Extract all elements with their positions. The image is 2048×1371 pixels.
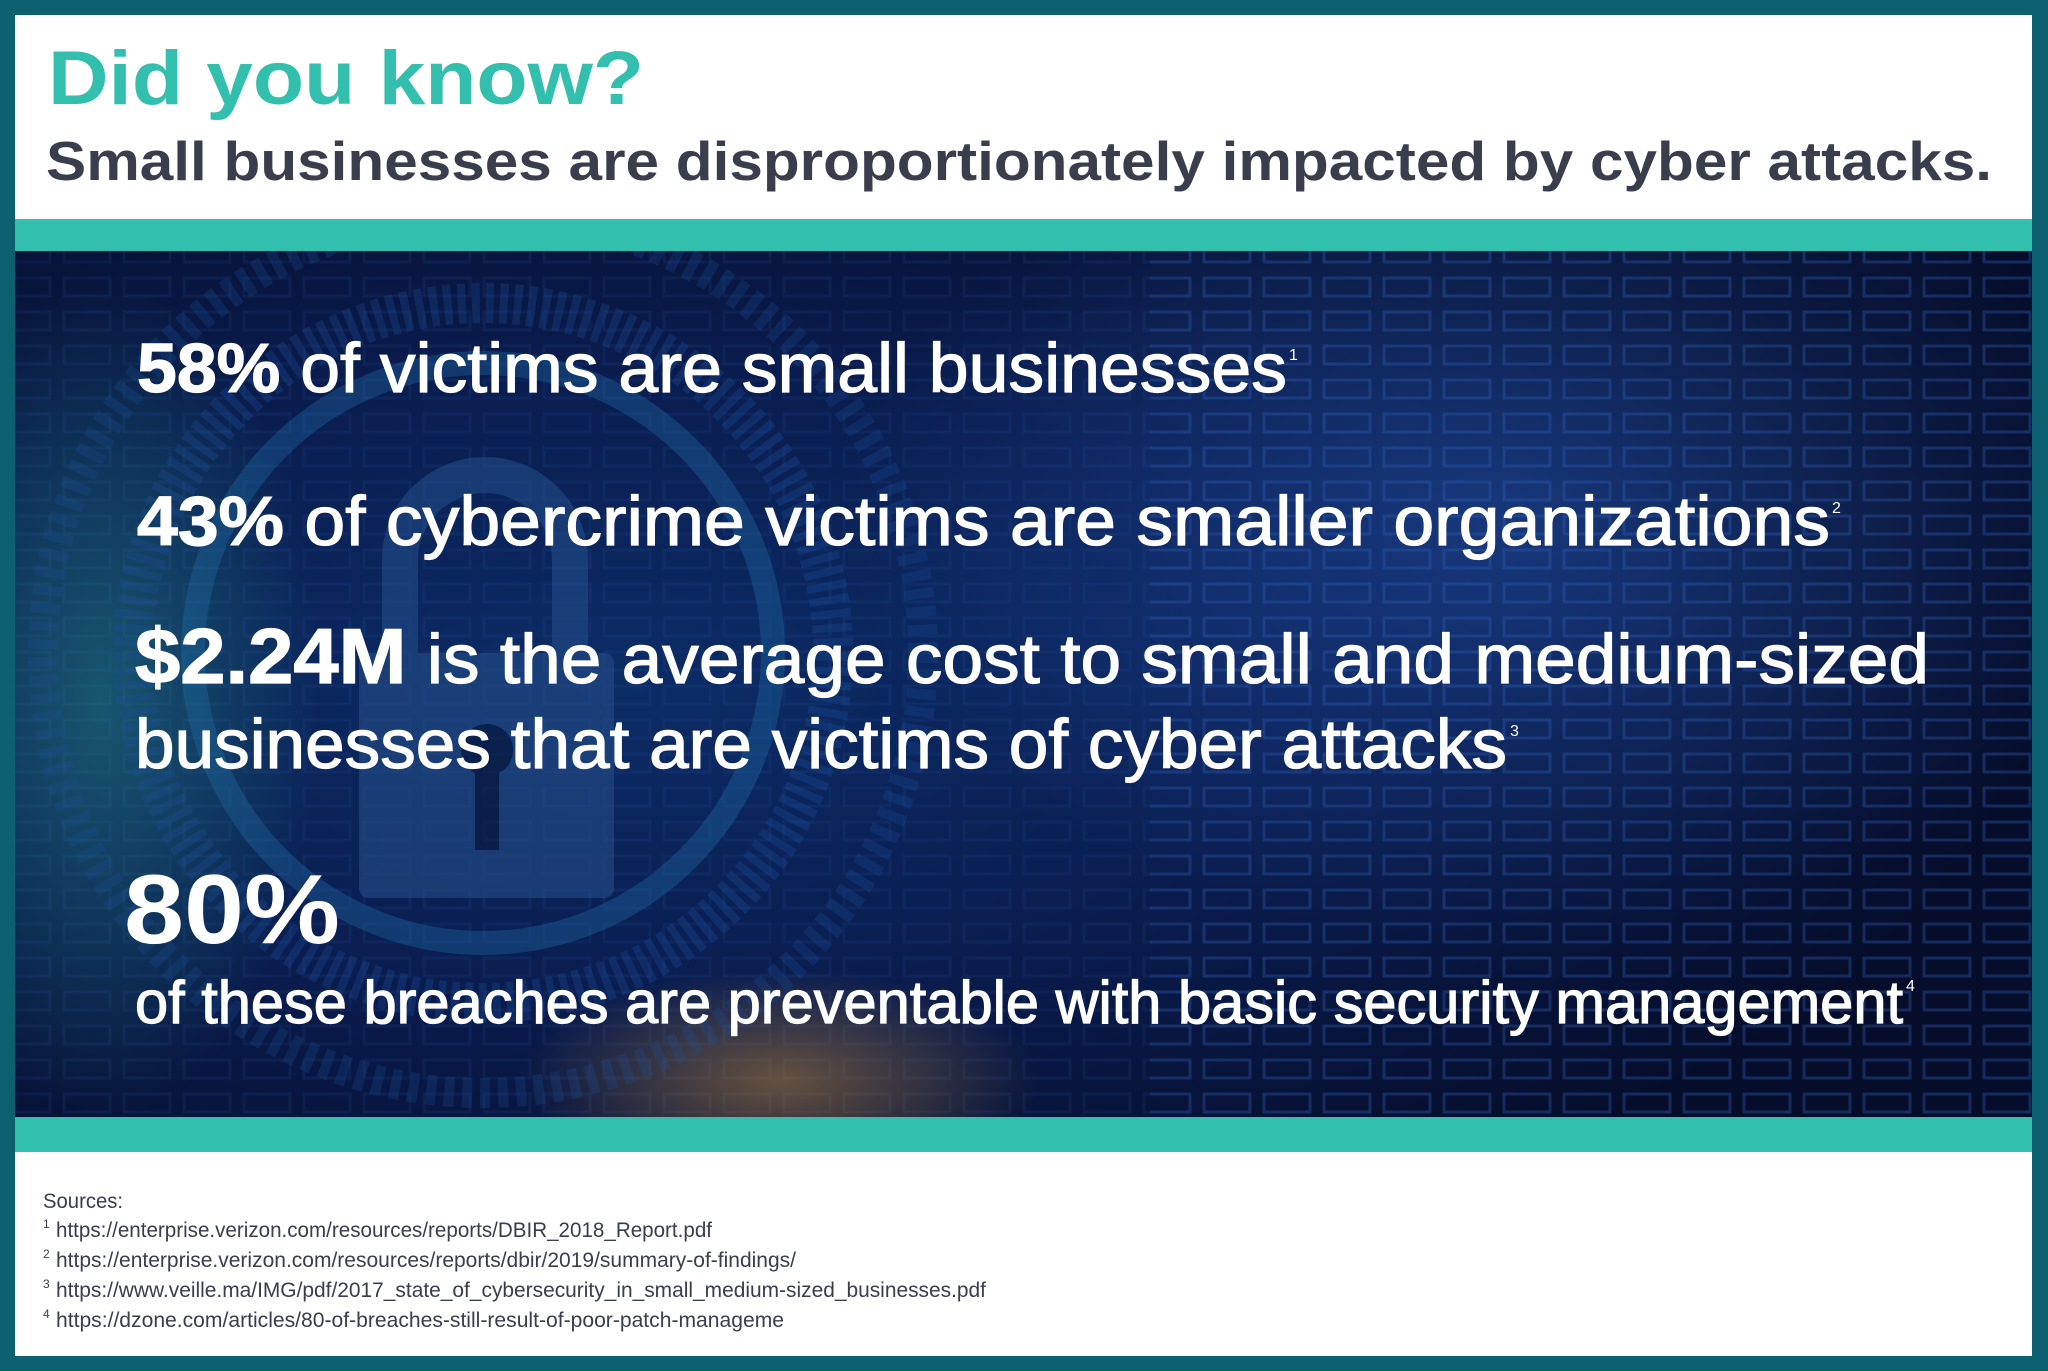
stat: 43%: 43% of cybercrime victims are smaller organizations [137, 482, 1830, 560]
title: Did you know? [48, 36, 644, 121]
teal bar top [15, 219, 2032, 251]
panel: dark cyber background with stats [15, 251, 2032, 1117]
sources panel: https://enterprise.verizon.com/resources/reports/dbir/2019/summary-of-findings/ [56, 1249, 796, 1272]
sources panel: 4 [43, 1307, 50, 1321]
icon: padlock background [359, 475, 614, 898]
sources panel: https://www.veille.ma/IMG/pdf/2017_state_of_cybersecurity_in_small_medium-sized_businesses.pdf [56, 1279, 986, 1302]
panel: dark cyber background with stats: of these breaches are preventable with basic security management [135, 969, 1903, 1036]
panel: dark cyber background with stats: 3 [1510, 723, 1519, 740]
sources panel: https://enterprise.verizon.com/resources/reports/DBIR_2018_Report.pdf [56, 1219, 712, 1242]
sources panel: 2 [43, 1247, 50, 1261]
stat: 80%: 80% [124, 854, 340, 964]
panel: dark cyber background with stats: 2 [1832, 500, 1841, 517]
subtitle: Small businesses are disproportionately impacted by cyber attacks. [46, 130, 1992, 192]
panel: dark cyber background with stats: 1 [1289, 347, 1298, 364]
panel: dark cyber background with stats: businesses that are victims of cyber attacks [135, 705, 1507, 783]
sources panel [15, 1152, 2032, 1356]
stat: 58%: 58% of victims are small businesses [137, 329, 1287, 407]
sources panel: 3 [43, 1277, 50, 1291]
teal bar bottom [15, 1117, 2032, 1152]
sources panel: https://dzone.com/articles/80-of-breaches-still-result-of-poor-patch-manageme [56, 1309, 784, 1332]
sources panel: Sources: [43, 1190, 123, 1213]
panel: dark cyber background with stats: 4 [1906, 978, 1915, 995]
header panel [15, 15, 2032, 219]
stat: $2.24M: $2.24M is the average cost to small and medium-sized [135, 612, 1929, 700]
sources panel: 1 [43, 1217, 50, 1231]
